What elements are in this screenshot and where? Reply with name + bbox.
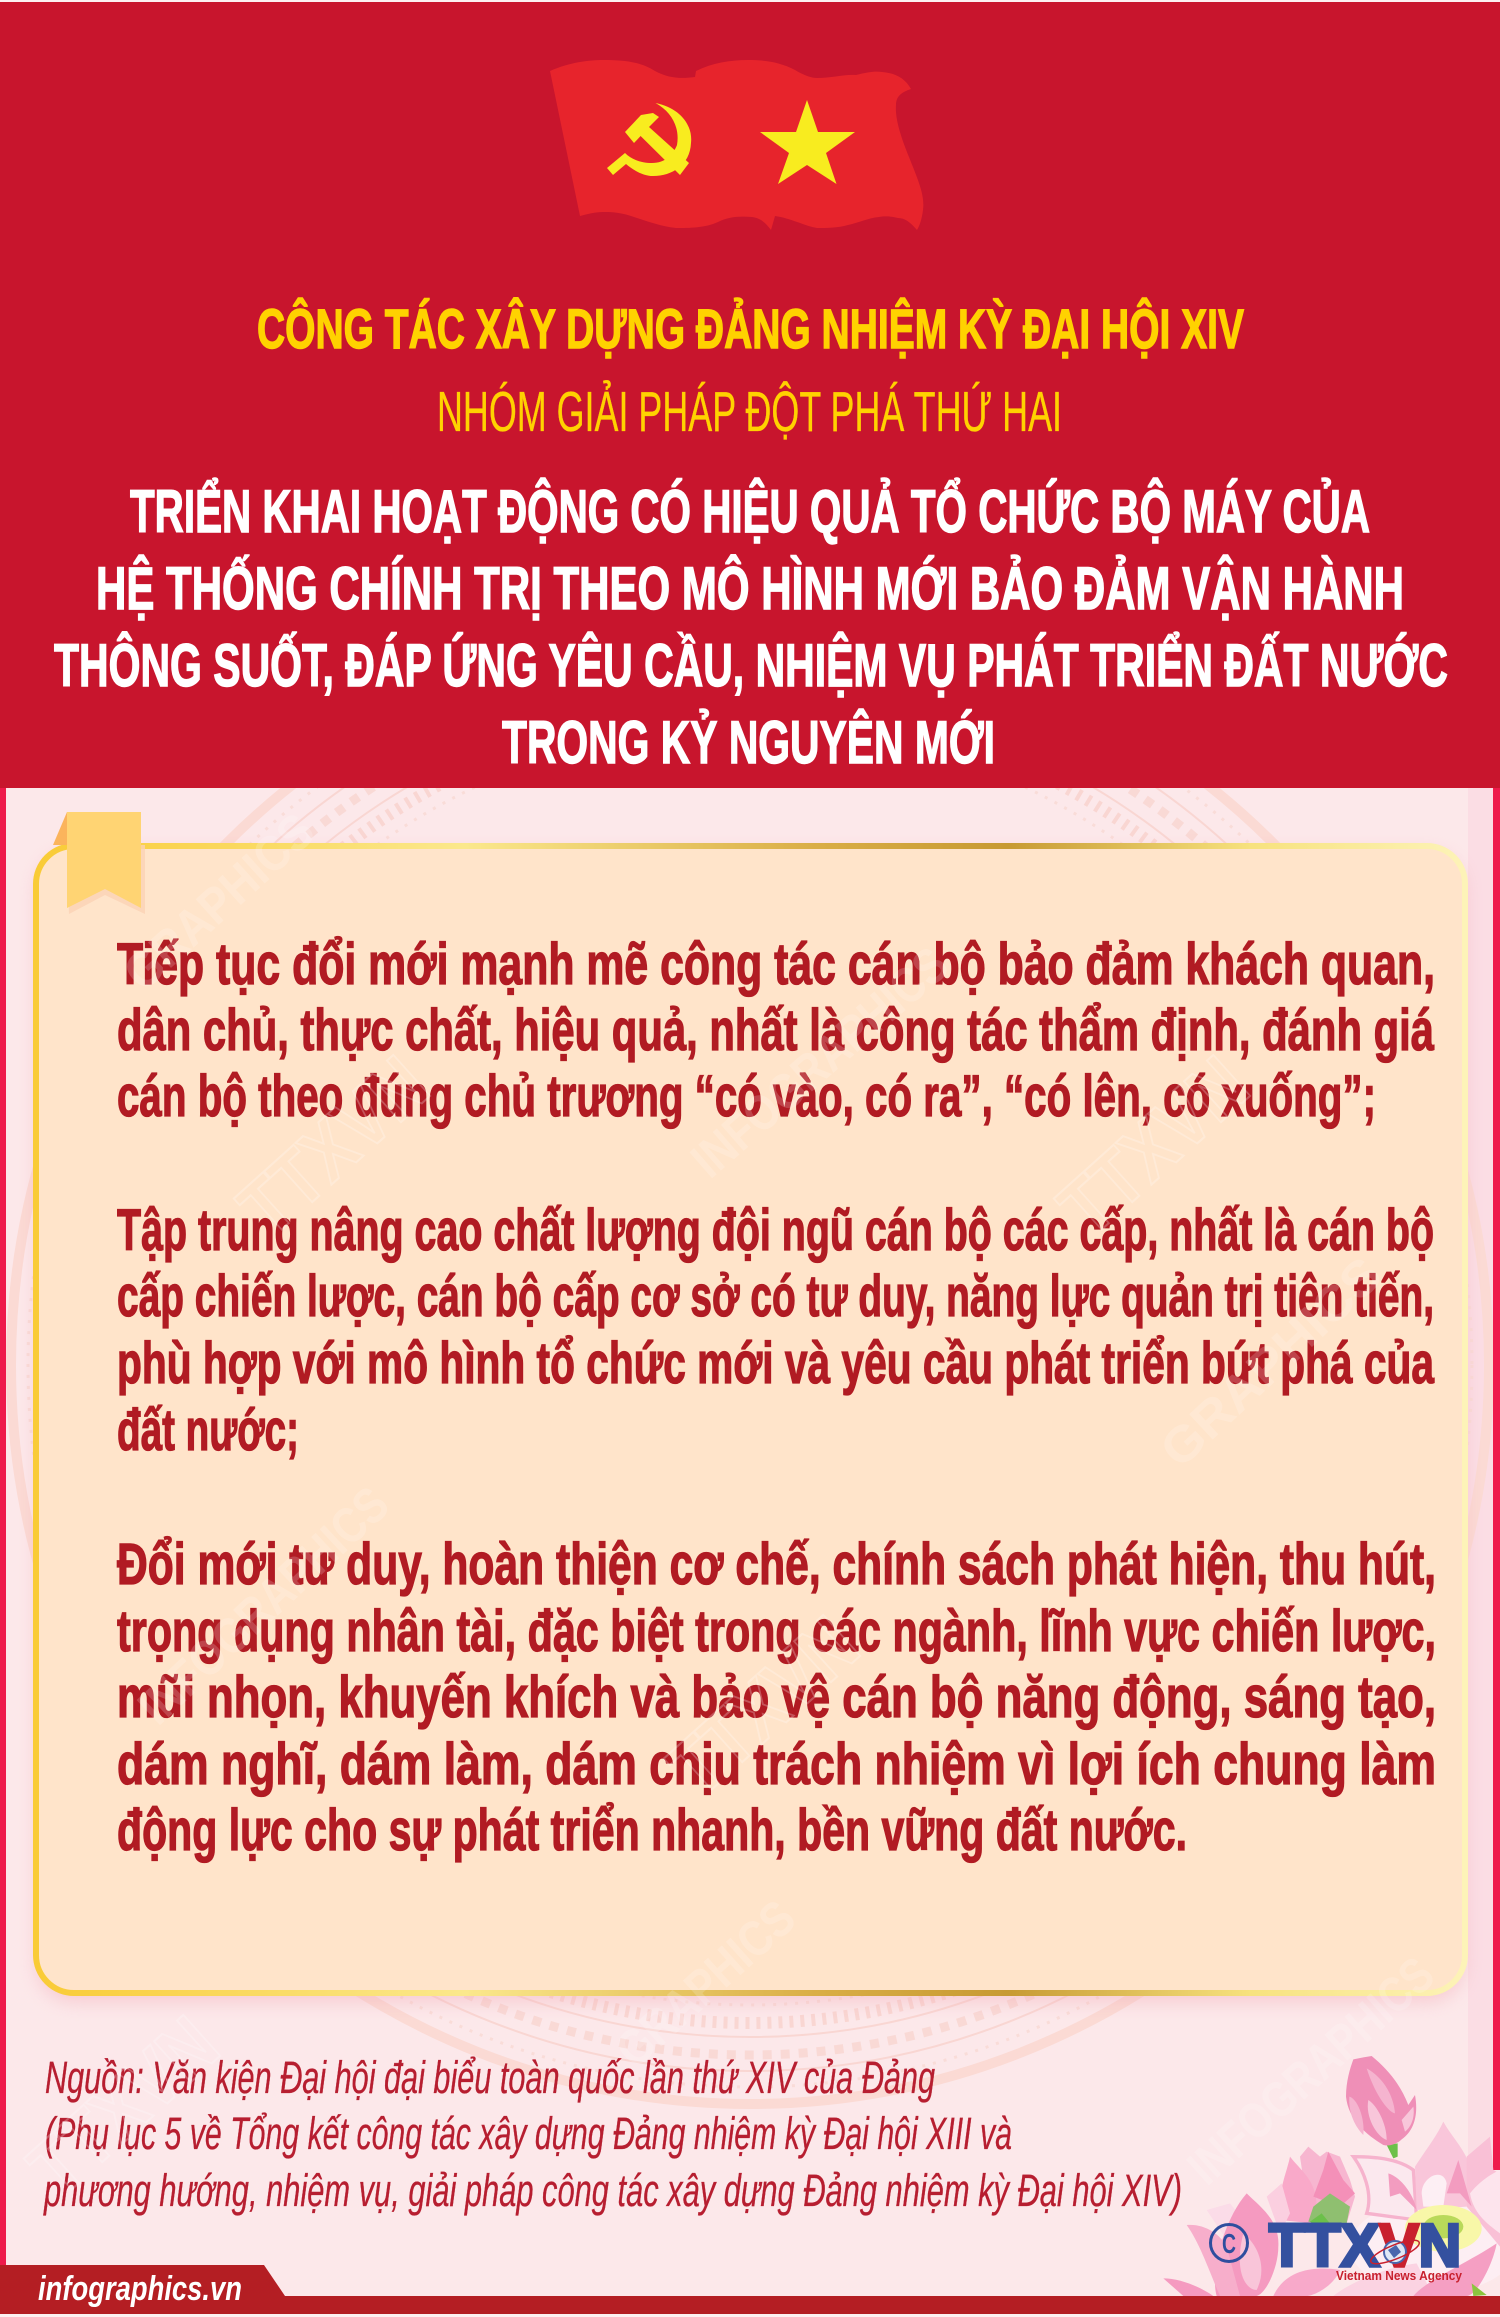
header band (0, 2, 1500, 788)
text: paragraph 3 (117, 1532, 1436, 1863)
icon: copyright (1210, 2224, 1248, 2262)
text: paragraph 2: đất nước; (117, 1398, 299, 1463)
subtitle line: NHÓM GIẢI PHÁP ĐỘT PHÁ THỨ HAI (437, 379, 1062, 444)
watermark: drum emblem (6, 788, 1493, 2109)
back lotus bud (1279, 2147, 1355, 2228)
icon: waving flag with hammer, sickle and star (550, 60, 923, 230)
main heading (54, 478, 1448, 776)
TTXVN wordmark: TTXVN (1269, 2212, 1461, 2279)
watermark: diagonal text (12, 802, 1445, 2213)
watermark: diagonal text: GRAPHICS (605, 1889, 806, 2078)
watermark: diagonal text: INFOGRAPHICS (1177, 1946, 1445, 2195)
text: source note: (Phụ lục 5 về Tổng kết công tác xây dựng Đảng nhiệm kỳ Đại hội XIII và (45, 2108, 1012, 2159)
watermark: diagonal text: GRAPHICS (1149, 1246, 1392, 1478)
watermark: diagonal text: GRAPHICS (113, 802, 325, 1001)
icon: lotus flowers (1163, 2056, 1500, 2296)
right lotus (1333, 2122, 1500, 2296)
left lotus (1163, 2183, 1340, 2296)
text: website: infographics.vn (38, 2270, 242, 2308)
icon: bookmark ribbon (53, 812, 145, 914)
logo: TTXVN (1210, 2212, 1463, 2283)
text: paragraph 2 (117, 1198, 1435, 1463)
icon: globe (1368, 2236, 1422, 2268)
icon: star (760, 100, 855, 184)
watermark: diagonal text: TTXVN (1042, 1039, 1265, 1253)
watermark: diagonal text: TTXVN (222, 1039, 445, 1253)
title block (54, 297, 1448, 776)
side stripes (0, 788, 1500, 2278)
main heading: TRONG KỶ NGUYÊN MỚI (502, 709, 995, 776)
text: source note: Nguồn: Văn kiện Đại hội đại biểu toàn quốc lần thứ XIV của Đảng (45, 2052, 935, 2103)
watermark: diagonal text: INFOGRAPHICS (127, 1476, 400, 1735)
icon: sickle (607, 103, 691, 176)
watermark: diagonal text: INFOGRAPHICS (680, 936, 959, 1188)
panel: content card (36, 812, 1465, 2002)
watermark: diagonal text: TTXVN (12, 1999, 235, 2213)
lotus bud (1346, 2056, 1416, 2158)
text: paragraph 1 (117, 932, 1435, 1129)
footer bar (0, 2265, 1500, 2314)
watermark: diagonal text: TTXVN (652, 1599, 875, 1813)
text: source note (43, 2052, 1182, 2216)
icon: hammer (625, 113, 689, 175)
icon: copyright: C (1222, 2228, 1236, 2259)
tagline: Vietnam News Agency (1336, 2268, 1463, 2283)
